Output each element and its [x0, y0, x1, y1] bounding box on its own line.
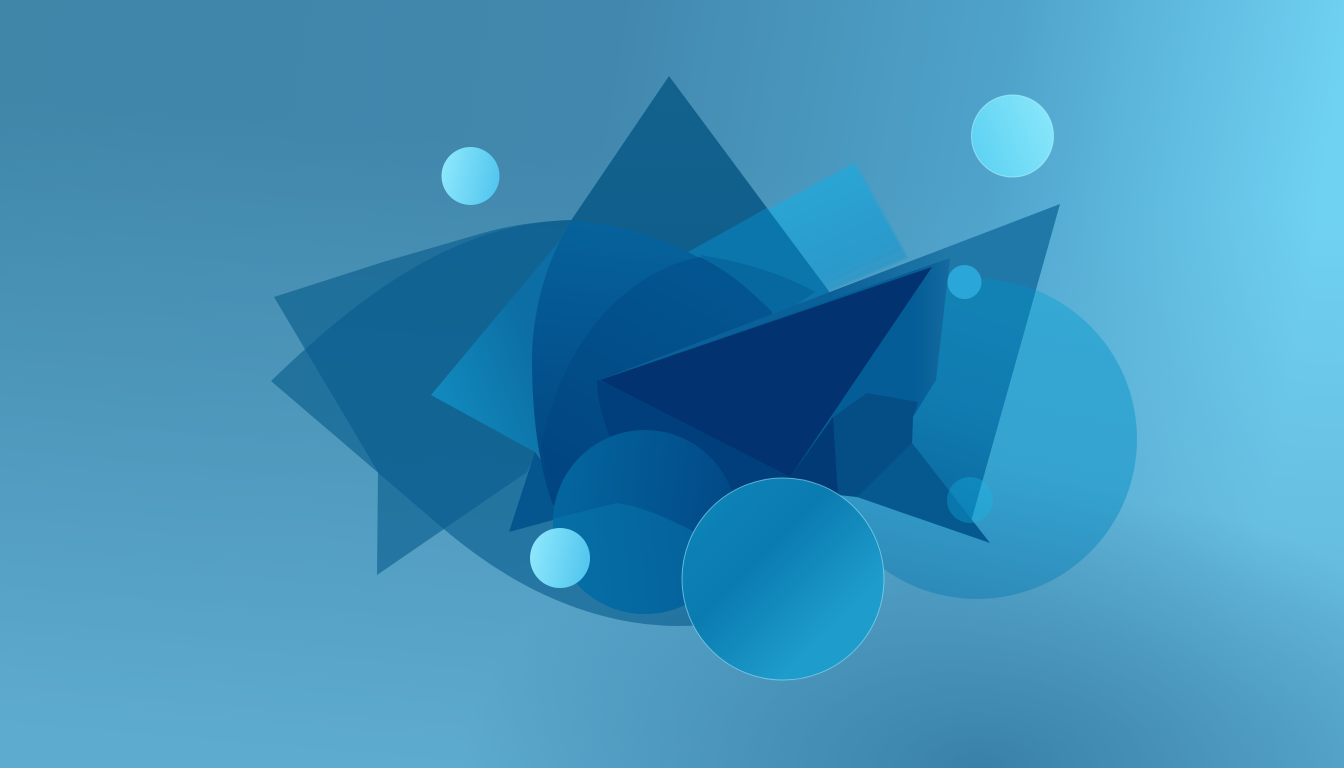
tilted square: left part	[431, 226, 572, 470]
inner lobe	[700, 255, 815, 330]
inner dark arc	[597, 380, 810, 552]
front circle	[682, 478, 884, 680]
curved blob	[271, 220, 845, 626]
small circle top left	[442, 147, 500, 205]
small blue circle upper right	[948, 265, 982, 299]
left kite	[274, 220, 572, 472]
large right circle	[817, 279, 1137, 599]
inner panel	[600, 258, 950, 497]
tilted square: right part	[688, 163, 908, 292]
lower right triangle	[857, 443, 990, 543]
square and triangle overlap	[688, 208, 832, 345]
small blue circle lower right	[947, 477, 993, 523]
top triangle	[570, 76, 828, 300]
navy lower wedge	[790, 417, 838, 495]
small circle lower left	[530, 528, 590, 588]
outer arch	[532, 221, 810, 505]
middle circle lower lobe	[553, 503, 694, 614]
small triangle lower left	[377, 472, 527, 575]
navy triangle	[600, 267, 932, 477]
second arch	[541, 257, 800, 500]
right large triangle	[600, 204, 1060, 525]
middle circle	[553, 430, 732, 614]
small circle top right	[972, 95, 1054, 177]
triangle inside circle	[912, 279, 1036, 519]
small dark triangle	[509, 452, 570, 532]
dark overlap panel	[833, 393, 918, 497]
